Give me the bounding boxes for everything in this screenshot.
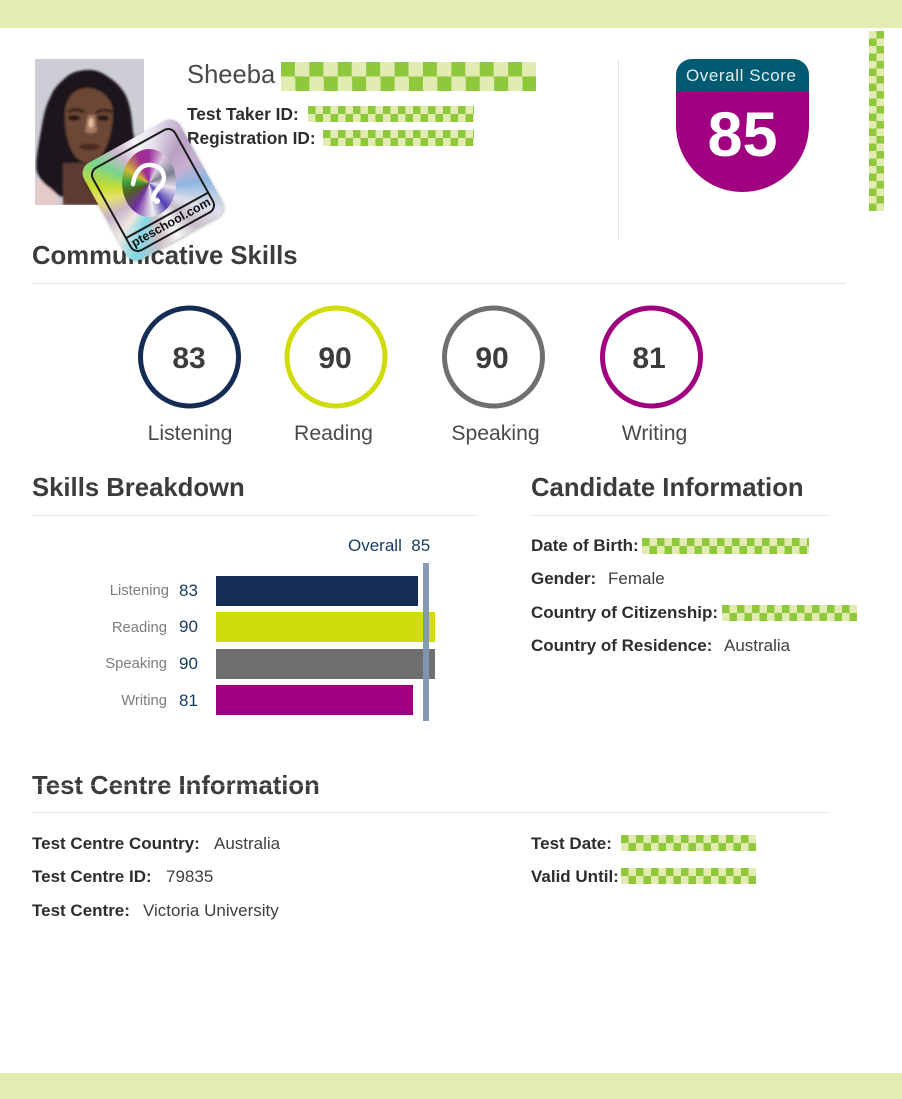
- row label: listening: Listening: [110, 583, 169, 599]
- row label: speaking: Speaking: [105, 656, 167, 672]
- valid until: Valid Until:: [531, 867, 619, 886]
- overall marker: [423, 563, 429, 721]
- text: Female: [608, 569, 665, 588]
- test centre id: [32, 867, 213, 886]
- bar: reading: [216, 612, 435, 642]
- test taker id: Test Taker ID:: [187, 104, 299, 124]
- candidate: citizenship: Country of Citizenship:: [531, 603, 718, 622]
- name: Sheeba: [187, 61, 275, 89]
- hologram sticker: [78, 115, 228, 264]
- candidate: gender: Gender:: [531, 569, 596, 588]
- bar chart labels: [105, 536, 430, 710]
- candidate: residence: [531, 636, 790, 655]
- date of birth redaction: [642, 538, 809, 554]
- text: Australia: [724, 636, 790, 655]
- row label: writing: Writing: [121, 693, 167, 709]
- row value: listening: 83: [179, 581, 198, 600]
- label: writing: Writing: [622, 422, 687, 445]
- registration id: Registration ID:: [187, 128, 316, 148]
- candidate photo: [35, 59, 144, 205]
- sticker frame: [88, 124, 218, 255]
- overall score badge: [676, 59, 809, 192]
- text: Victoria University: [143, 901, 279, 920]
- heading: candidate information: Candidate Information: [531, 474, 804, 502]
- sticker disc: [122, 149, 176, 217]
- top banner: [0, 0, 902, 28]
- header divider: [618, 59, 619, 240]
- skill circle: speaking: [442, 306, 545, 408]
- row value: speaking: 90: [179, 654, 198, 673]
- test centre id: Test Centre ID:: [32, 867, 152, 886]
- bar: speaking: [216, 649, 435, 679]
- skill circle: reading: [284, 306, 388, 408]
- label: listening: Listening: [148, 422, 232, 445]
- test taker id redaction: [308, 106, 474, 122]
- test date redaction: [621, 835, 756, 851]
- sticker text: pteschool.com: [129, 194, 213, 249]
- valid until redaction: [621, 868, 756, 884]
- bar: listening: [216, 576, 418, 606]
- row value: writing: 81: [179, 691, 198, 710]
- candidate: residence: Country of Residence:: [531, 636, 712, 655]
- registration id redaction: [323, 130, 474, 146]
- bottom banner: [0, 1073, 902, 1099]
- text: 79835: [166, 867, 213, 886]
- label: speaking: Speaking: [451, 422, 540, 445]
- citizenship redaction: [722, 605, 857, 621]
- row value: reading: 90: [179, 617, 198, 636]
- heading: skills breakdown: Skills Breakdown: [32, 474, 245, 502]
- overall score badge: 85: [707, 100, 778, 170]
- candidate: gender: [531, 569, 665, 588]
- side redaction strip: [869, 31, 884, 211]
- heading: test centre information: Test Centre Information: [32, 772, 320, 800]
- overall label: Overall 85: [348, 536, 430, 555]
- skill circle: listening: [138, 306, 241, 408]
- skill circle: listening: 83: [172, 342, 206, 375]
- heading: communicative skills: Communicative Skills: [32, 242, 298, 270]
- test centre: Test Centre:: [32, 901, 130, 920]
- overall score badge: Overall Score: [686, 66, 796, 85]
- skill circle: speaking: 90: [475, 342, 509, 375]
- bar: writing: [216, 685, 413, 715]
- name redaction: [281, 62, 536, 91]
- sticker symbol: [130, 162, 166, 204]
- test centre: [32, 901, 279, 920]
- test centre country: [32, 834, 280, 853]
- row label: reading: Reading: [112, 620, 167, 636]
- text: Australia: [214, 834, 280, 853]
- label: reading: Reading: [294, 422, 373, 445]
- sticker divider: [125, 191, 209, 239]
- candidate: date of birth: Date of Birth:: [531, 536, 639, 555]
- test centre country: Test Centre Country:: [32, 834, 200, 853]
- skill circle: reading: 90: [318, 342, 352, 375]
- test date: Test Date:: [531, 834, 612, 853]
- skill circle: writing: [600, 306, 703, 408]
- skill circle: writing: 81: [632, 342, 666, 375]
